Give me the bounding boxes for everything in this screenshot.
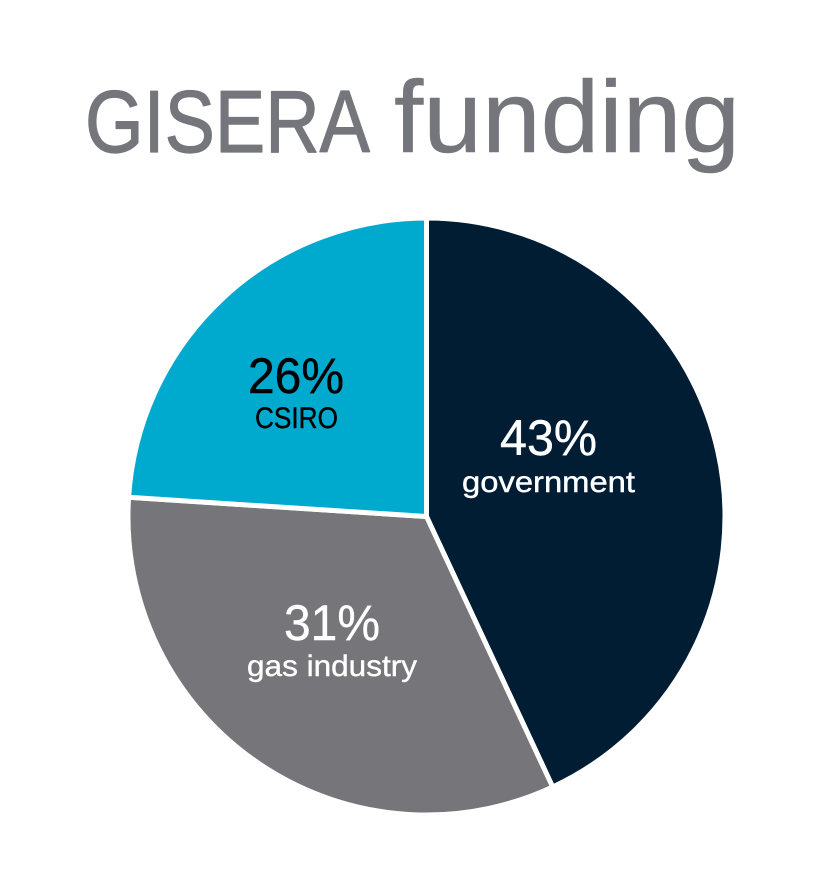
label: government xyxy=(462,410,636,499)
slice: CSIRO 26% xyxy=(129,218,426,516)
label: government: 43% xyxy=(500,410,597,466)
label: government: government xyxy=(462,466,636,499)
slice: gas industry 31% xyxy=(128,497,553,815)
label: gas industry xyxy=(247,595,417,683)
title xyxy=(85,60,740,174)
label: CSIRO xyxy=(248,348,344,435)
title: funding xyxy=(394,60,740,174)
label: CSIRO: CSIRO xyxy=(255,402,338,435)
label: CSIRO: 26% xyxy=(248,348,344,404)
label: gas industry: 31% xyxy=(284,595,380,651)
label: gas industry: gas industry xyxy=(247,650,417,683)
title: GISERA xyxy=(85,72,370,171)
pie chart xyxy=(128,218,725,815)
slice: government 43% xyxy=(426,218,725,787)
